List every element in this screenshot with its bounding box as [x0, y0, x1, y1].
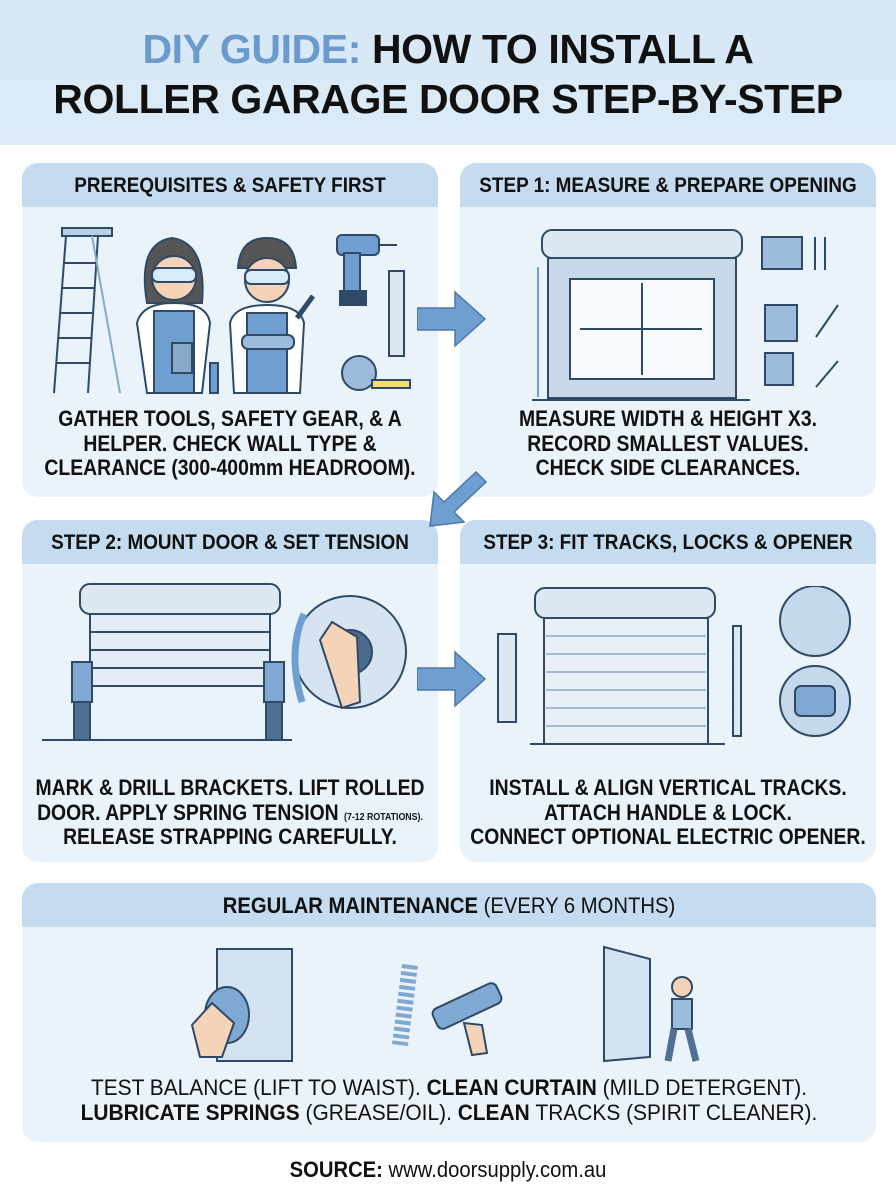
text: MEASURE WIDTH & HEIGHT X3.: [519, 406, 817, 431]
panel: step 2: [22, 520, 438, 862]
heading: [409, 520, 896, 564]
text: HELPER. CHECK WALL TYPE &: [83, 430, 377, 456]
header band: [0, 0, 896, 145]
text: [81, 1075, 817, 1124]
text: ATTACH HANDLE & LOCK.: [544, 800, 792, 824]
heading: REGULAR MAINTENANCE (EVERY 6 MONTHS): [223, 893, 675, 918]
heading: PREREQUISITES & SAFETY FIRST: [74, 174, 386, 197]
text: INSTALL & ALIGN VERTICAL TRACKS.: [489, 775, 847, 800]
icon: door with tracks, lock, motor: [497, 586, 851, 745]
arrow: diagonal: [429, 471, 487, 527]
panel: prerequisites: [22, 163, 438, 497]
icon: door opening with measurements: [532, 229, 839, 401]
heading: [0, 163, 489, 207]
text: MARK & DRILL BRACKETS. LIFT ROLLED: [36, 775, 424, 800]
text: [36, 775, 424, 849]
title: [53, 26, 843, 122]
heading: STEP 1: MEASURE & PREPARE OPENING: [479, 174, 857, 197]
text: RECORD SMALLEST VALUES.: [527, 430, 809, 456]
text: CHECK SIDE CLEARANCES.: [536, 455, 800, 480]
text: [470, 775, 866, 849]
title: ROLLER GARAGE DOOR STEP-BY-STEP: [53, 76, 843, 122]
icon: workers and tools: [53, 227, 411, 394]
text: DOOR. APPLY SPRING TENSION (7-12 ROTATIONS).: [37, 800, 423, 824]
heading: [19, 883, 879, 927]
heading: STEP 2: MOUNT DOOR & SET TENSION: [51, 531, 409, 554]
icon: two people lifting door with spring dial: [42, 583, 407, 741]
source: SOURCE: www.doorsupply.com.au: [290, 1157, 606, 1182]
heading: [0, 520, 489, 564]
text: LUBRICATE SPRINGS (GREASE/OIL). CLEAN TRACKS (SPIRIT CLEANER).: [81, 1100, 817, 1124]
heading: STEP 3: FIT TRACKS, LOCKS & OPENER: [483, 531, 853, 554]
text: RELEASE STRAPPING CAREFULLY.: [63, 824, 397, 849]
text: TEST BALANCE (LIFT TO WAIST). CLEAN CURTAIN (MILD DETERGENT).: [91, 1075, 807, 1100]
icons: clean, lubricate, test balance: [190, 946, 700, 1062]
text: GATHER TOOLS, SAFETY GEAR, & A: [58, 406, 402, 431]
title: DIY GUIDE: HOW TO INSTALL A: [142, 26, 754, 72]
panel: maintenance: [22, 883, 876, 1142]
panel: step 1: [460, 163, 876, 497]
arrow: right 2: [417, 650, 486, 708]
arrow: right 1: [417, 290, 486, 348]
text: CONNECT OPTIONAL ELECTRIC OPENER.: [470, 824, 866, 849]
heading: [409, 163, 896, 207]
text: [44, 406, 416, 480]
text: CLEARANCE (300-400mm HEADROOM).: [44, 455, 416, 480]
panel: step 3: [460, 520, 876, 862]
text: [519, 406, 817, 480]
